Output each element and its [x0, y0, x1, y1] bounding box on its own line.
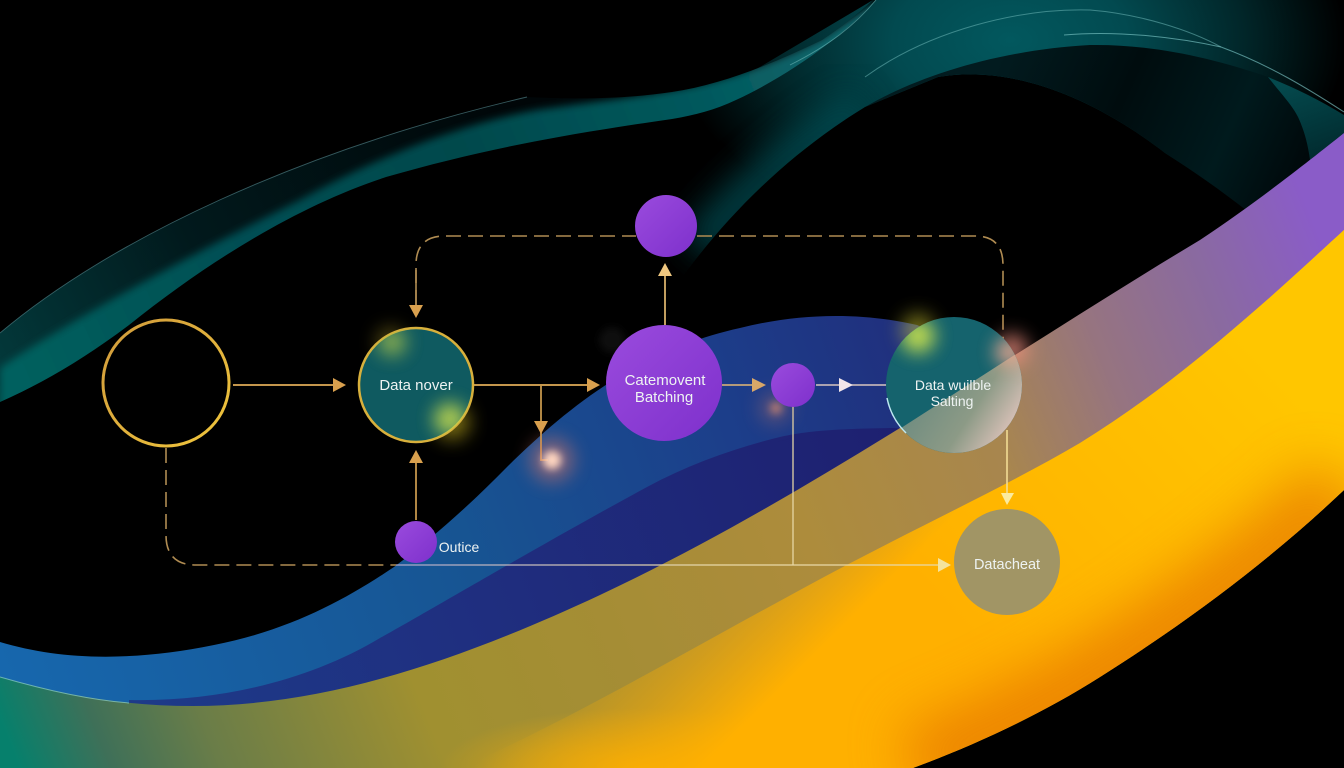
label: Datacheat: Datacheat: [974, 557, 1040, 573]
glow: dim node near small circle: [759, 392, 791, 424]
node: top purple circle: [635, 195, 697, 257]
label: Data nover: Data nover: [379, 377, 453, 394]
arrow: branch down to glow node: [534, 385, 548, 460]
label: Catemovent Batching: Catemovent: [625, 372, 706, 389]
connector: small node down to bottom line: [792, 405, 794, 565]
glow: Data wuilble halos: [901, 313, 1028, 366]
band: teal upper-left wave: [0, 0, 876, 430]
arrow: Outice to Data nover: [409, 450, 423, 520]
node: Data nover: [359, 328, 473, 442]
label: Data wuilble Salting: Data wuilble: [915, 377, 991, 393]
glow: Data nover halo: [376, 327, 470, 440]
connector: top dashed loop: [416, 236, 1003, 340]
node: start ring: [103, 320, 229, 446]
arrow: Batching to small node: [722, 378, 766, 392]
band: blue wave: [0, 316, 1000, 768]
label: Outice: Outice: [439, 539, 479, 555]
node: small purple circle: [771, 363, 815, 407]
node: Datacheat: [954, 509, 1060, 615]
connector: bottom dashed line: [166, 448, 396, 565]
arrow: Batching to top node: [658, 263, 672, 325]
arrow: small node to Data wuilble: [816, 378, 888, 392]
band: bottom gold glow: [440, 708, 840, 768]
band: gold wave: [460, 230, 1344, 768]
arrow: start ring to Data nover: [233, 378, 346, 392]
band: navy inner wave: [129, 428, 950, 720]
node: Data wuilble Salting: [886, 317, 1022, 453]
connector: bottom solid line to Datacheat: [396, 558, 951, 572]
band: teal upper-right wave: [682, 0, 1344, 264]
node: Outice: [395, 521, 479, 563]
arrow: Data nover to Batching: [474, 378, 600, 392]
glow: faint spot left of Batching: [599, 327, 625, 353]
arrow: Data wuilble to Datacheat: [1001, 430, 1014, 505]
band: hairline on wave edge: [0, 677, 129, 703]
node: Catemovent Batching: [606, 325, 722, 441]
label: Catemovent Batching: Batching: [635, 389, 693, 406]
arrow: dashed loop into Data nover: [409, 270, 423, 318]
glow: pink junction: [530, 438, 574, 482]
label: Data wuilble Salting: Salting: [931, 393, 973, 409]
